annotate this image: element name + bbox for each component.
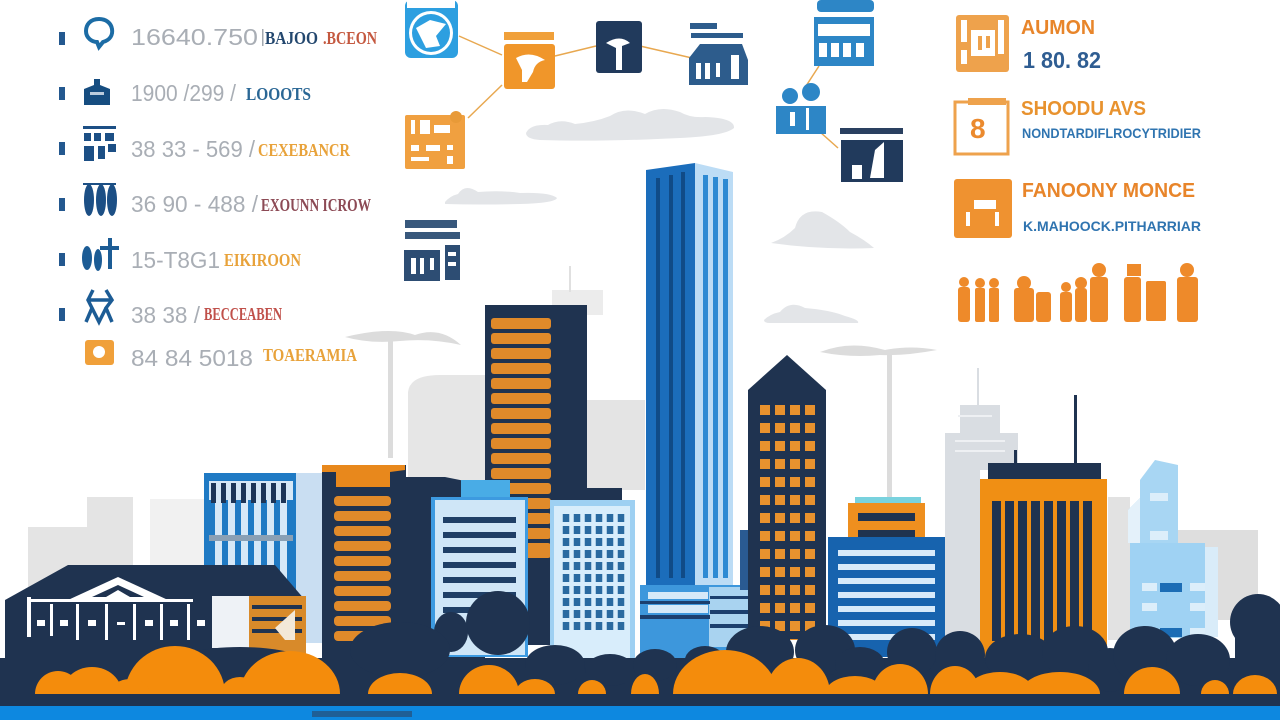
- icon: orange dashboard: [956, 15, 1009, 72]
- right panel: Fanoony Monce: [954, 179, 1201, 238]
- row 7: TOAERAMIA: [263, 345, 357, 365]
- orange shrubs: [35, 646, 1277, 720]
- row 3: [59, 126, 351, 162]
- row 5: EIKIROON: [224, 250, 301, 270]
- building: pale blue tower: [1128, 460, 1218, 638]
- navy tower with orange windows: [740, 355, 826, 640]
- clouds: [445, 109, 874, 323]
- icon: orange board: [405, 111, 465, 169]
- row 1: 16640.750: [131, 24, 258, 50]
- icon: orange figure: [504, 32, 555, 89]
- row 6: [59, 290, 282, 328]
- building: light blue with navy stripes: [431, 480, 528, 657]
- building: navy tower with orange bars: [485, 305, 622, 648]
- right panel: Aumon: [956, 15, 1101, 73]
- icon: navy figure: [596, 21, 642, 73]
- ground strip: [0, 694, 1280, 720]
- row 3: CEXEBANCR: [258, 140, 351, 160]
- skyscraper base: [640, 585, 760, 660]
- building: navy block with orange stripes: [322, 465, 485, 660]
- icon: blue people: [776, 83, 826, 134]
- building: blue with light stripes: [828, 497, 945, 657]
- icon: lower navy skyline: [404, 220, 460, 281]
- navy tree line: [0, 591, 1280, 700]
- icon: navy panel: [840, 128, 903, 182]
- icon: blue building: [814, 0, 874, 66]
- row 3: 38 33 - 569 /: [131, 136, 256, 162]
- right panel: Shoodu Avs: NONDTARDIFLROCYTRIDIER: [1022, 125, 1201, 141]
- building: blue office: [204, 473, 322, 643]
- row 1: .BCEON: [323, 28, 377, 48]
- row 4: 36 90 - 488 /: [131, 191, 259, 217]
- row 5: 15-T8G1: [131, 247, 220, 273]
- right panel: Shoodu Avs: [955, 98, 1201, 154]
- row 5: [59, 238, 301, 273]
- connector lines: [459, 36, 838, 148]
- icon: orange case: [954, 179, 1012, 238]
- street lamps: [345, 331, 937, 500]
- row 2: [59, 79, 311, 106]
- background skyline: [28, 266, 1258, 640]
- row 6: BECCEABEN: [204, 304, 282, 324]
- right panel: Aumon: 1 80. 82: [1023, 47, 1101, 73]
- icon: row of people: [958, 263, 1198, 322]
- row 4: EXOUNN ICROW: [261, 195, 371, 215]
- building: light grid tower: [550, 500, 635, 665]
- icon: globe: [405, 0, 458, 58]
- right panel: Shoodu Avs: SHOODU AVS: [1021, 98, 1146, 120]
- row 1: [59, 19, 377, 50]
- row 7: 84 84 5018: [131, 345, 253, 371]
- civic hall: [5, 565, 306, 660]
- icon: calendar: [955, 98, 1008, 154]
- left stats list: [59, 19, 377, 371]
- row 7: [85, 340, 357, 371]
- right panel: Aumon: AUMON: [1021, 17, 1095, 39]
- row 2: LOOOTS: [246, 84, 311, 104]
- building: orange tower: [980, 395, 1107, 664]
- icon: blue skyline: [689, 23, 748, 85]
- right panel: Fanoony Monce: FANOONY MONCE: [1022, 180, 1195, 202]
- right panel: Fanoony Monce: K.MAHOOCK.PITHARRIAR: [1023, 218, 1201, 234]
- row 6: 38 38 /: [131, 302, 201, 328]
- row 2: 1900 /299 /: [131, 80, 237, 106]
- row 4: [59, 183, 371, 217]
- row 1: BAJOO: [265, 28, 318, 48]
- icon: calendar: 8: [970, 113, 986, 144]
- skyscraper: [646, 163, 733, 590]
